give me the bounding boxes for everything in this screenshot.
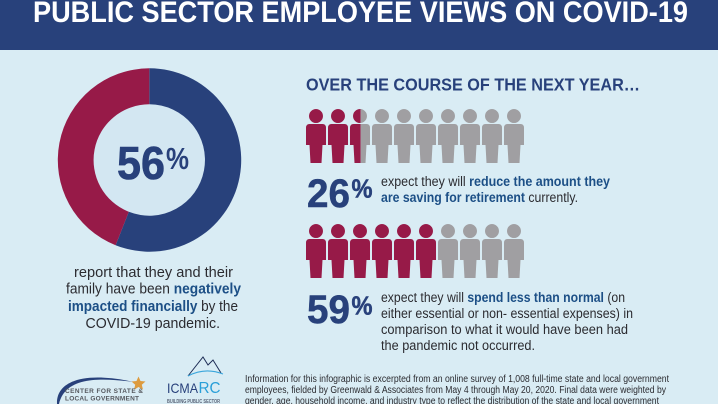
logo: Center for State and Local Government: [57, 376, 145, 404]
pictogram: 59 percent: [306, 224, 524, 278]
text: spend less than normal: [381, 290, 633, 353]
logo: ICMA-RC: [167, 357, 223, 404]
stat: 26%: %: [352, 174, 372, 204]
stat: 26%: 26: [307, 172, 350, 216]
donut chart: 56%: 56: [117, 137, 165, 189]
text: reduce retirement saving: [381, 174, 610, 205]
stat: 59%: 59: [307, 288, 350, 332]
logo: ICMA-RC: RC: [198, 380, 220, 397]
donut caption: report that they and their: [74, 264, 233, 281]
pictogram: 26 percent: [306, 109, 524, 163]
stat: 59%: [307, 288, 372, 332]
logo: ICMA-RC: ICMA: [167, 380, 199, 396]
stat: 26%: [307, 172, 372, 216]
text: reduce retirement saving: expect they will reduce the amount they: [381, 174, 610, 189]
source note: employees, fielded by Greenwald & Associates from May 4 through May 20, 2020. Final data were weighted by: [245, 385, 666, 396]
section heading: OVER THE COURSE OF THE NEXT YEAR…: [306, 74, 640, 94]
title banner: [0, 0, 718, 50]
donut caption: impacted financially by the: [68, 298, 238, 315]
donut caption: COVID-19 pandemic.: [86, 315, 220, 332]
text: spend less than normal: either essential or non- essential expenses) in: [381, 306, 633, 321]
source note: Information for this infographic is excerpted from an online survey of 1,008 full-time state and local government: [245, 374, 669, 385]
stat: 59%: %: [352, 290, 372, 320]
donut chart: 56%: %: [166, 141, 189, 176]
donut caption: family have been negatively: [66, 280, 242, 298]
text: spend less than normal: comparison to what it would have been had: [381, 322, 628, 337]
logo: Center for State and Local Government: LOCAL GOVERNMENT: [65, 396, 139, 402]
source note: [245, 374, 669, 404]
text: reduce retirement saving: are saving for retirement currently.: [381, 190, 578, 205]
text: spend less than normal: expect they will spend less than normal (on: [381, 290, 625, 305]
donut chart: 56%: [58, 68, 241, 252]
logo: Center for State and Local Government: CENTER FOR STATE &: [65, 388, 143, 395]
text: spend less than normal: the pandemic not occurred.: [381, 338, 535, 353]
donut caption: [66, 264, 242, 332]
